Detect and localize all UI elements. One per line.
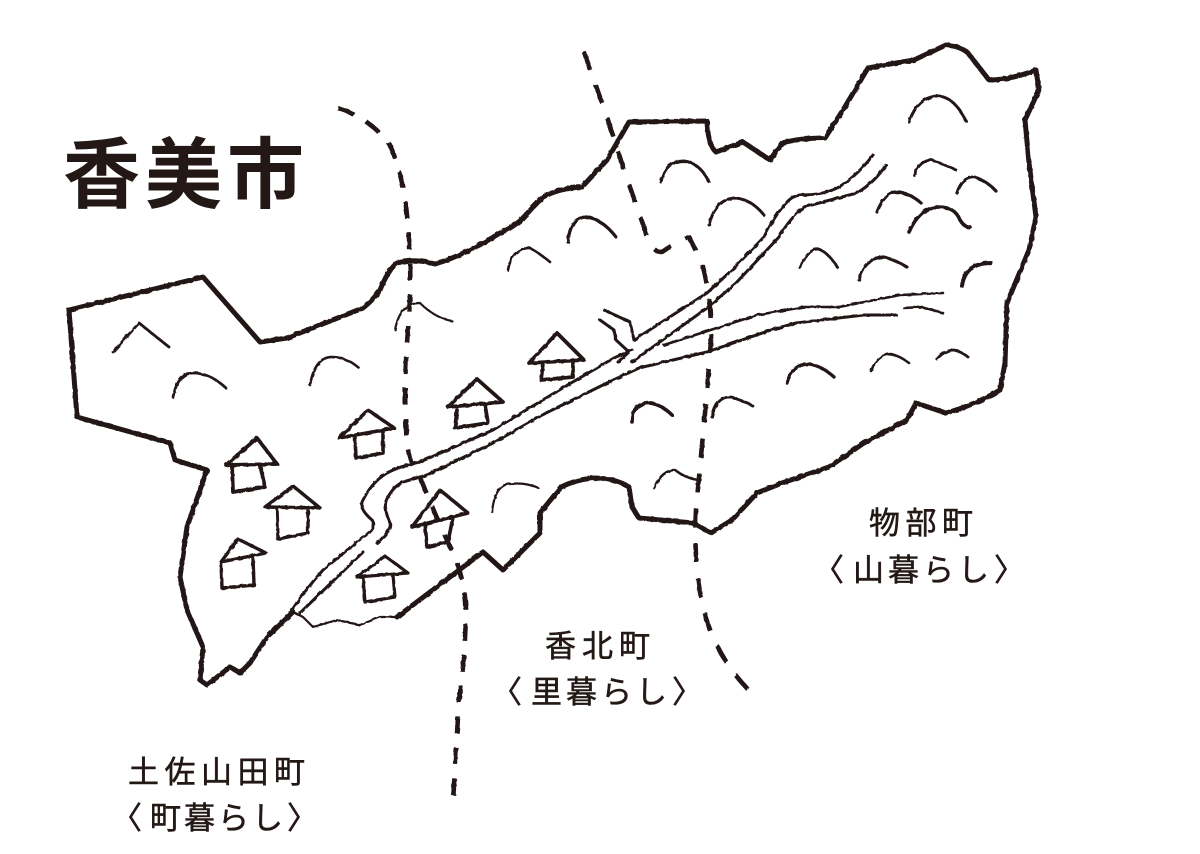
label: Kahoku: 香北町 [545, 629, 650, 664]
title: 香美市 [63, 133, 304, 219]
label: Monobe: 物部町 [869, 506, 973, 541]
map of Kami city [69, 45, 1039, 802]
label: Tosayamada: 土佐山田町 [128, 755, 305, 790]
label: Monobe: 〈山暮らし〉 [813, 553, 1025, 588]
label: Monobe [813, 506, 1025, 588]
label: Kahoku [491, 629, 703, 710]
label: Tosayamada: 〈町暮らし〉 [111, 801, 318, 836]
label: Tosayamada [111, 755, 318, 836]
dashed border left [338, 108, 466, 802]
mountains [113, 96, 996, 512]
label: Kahoku: 〈里暮らし〉 [491, 675, 703, 710]
river [290, 155, 943, 613]
city outline [69, 45, 1039, 617]
houses [221, 333, 584, 602]
dashed border right [584, 52, 758, 699]
